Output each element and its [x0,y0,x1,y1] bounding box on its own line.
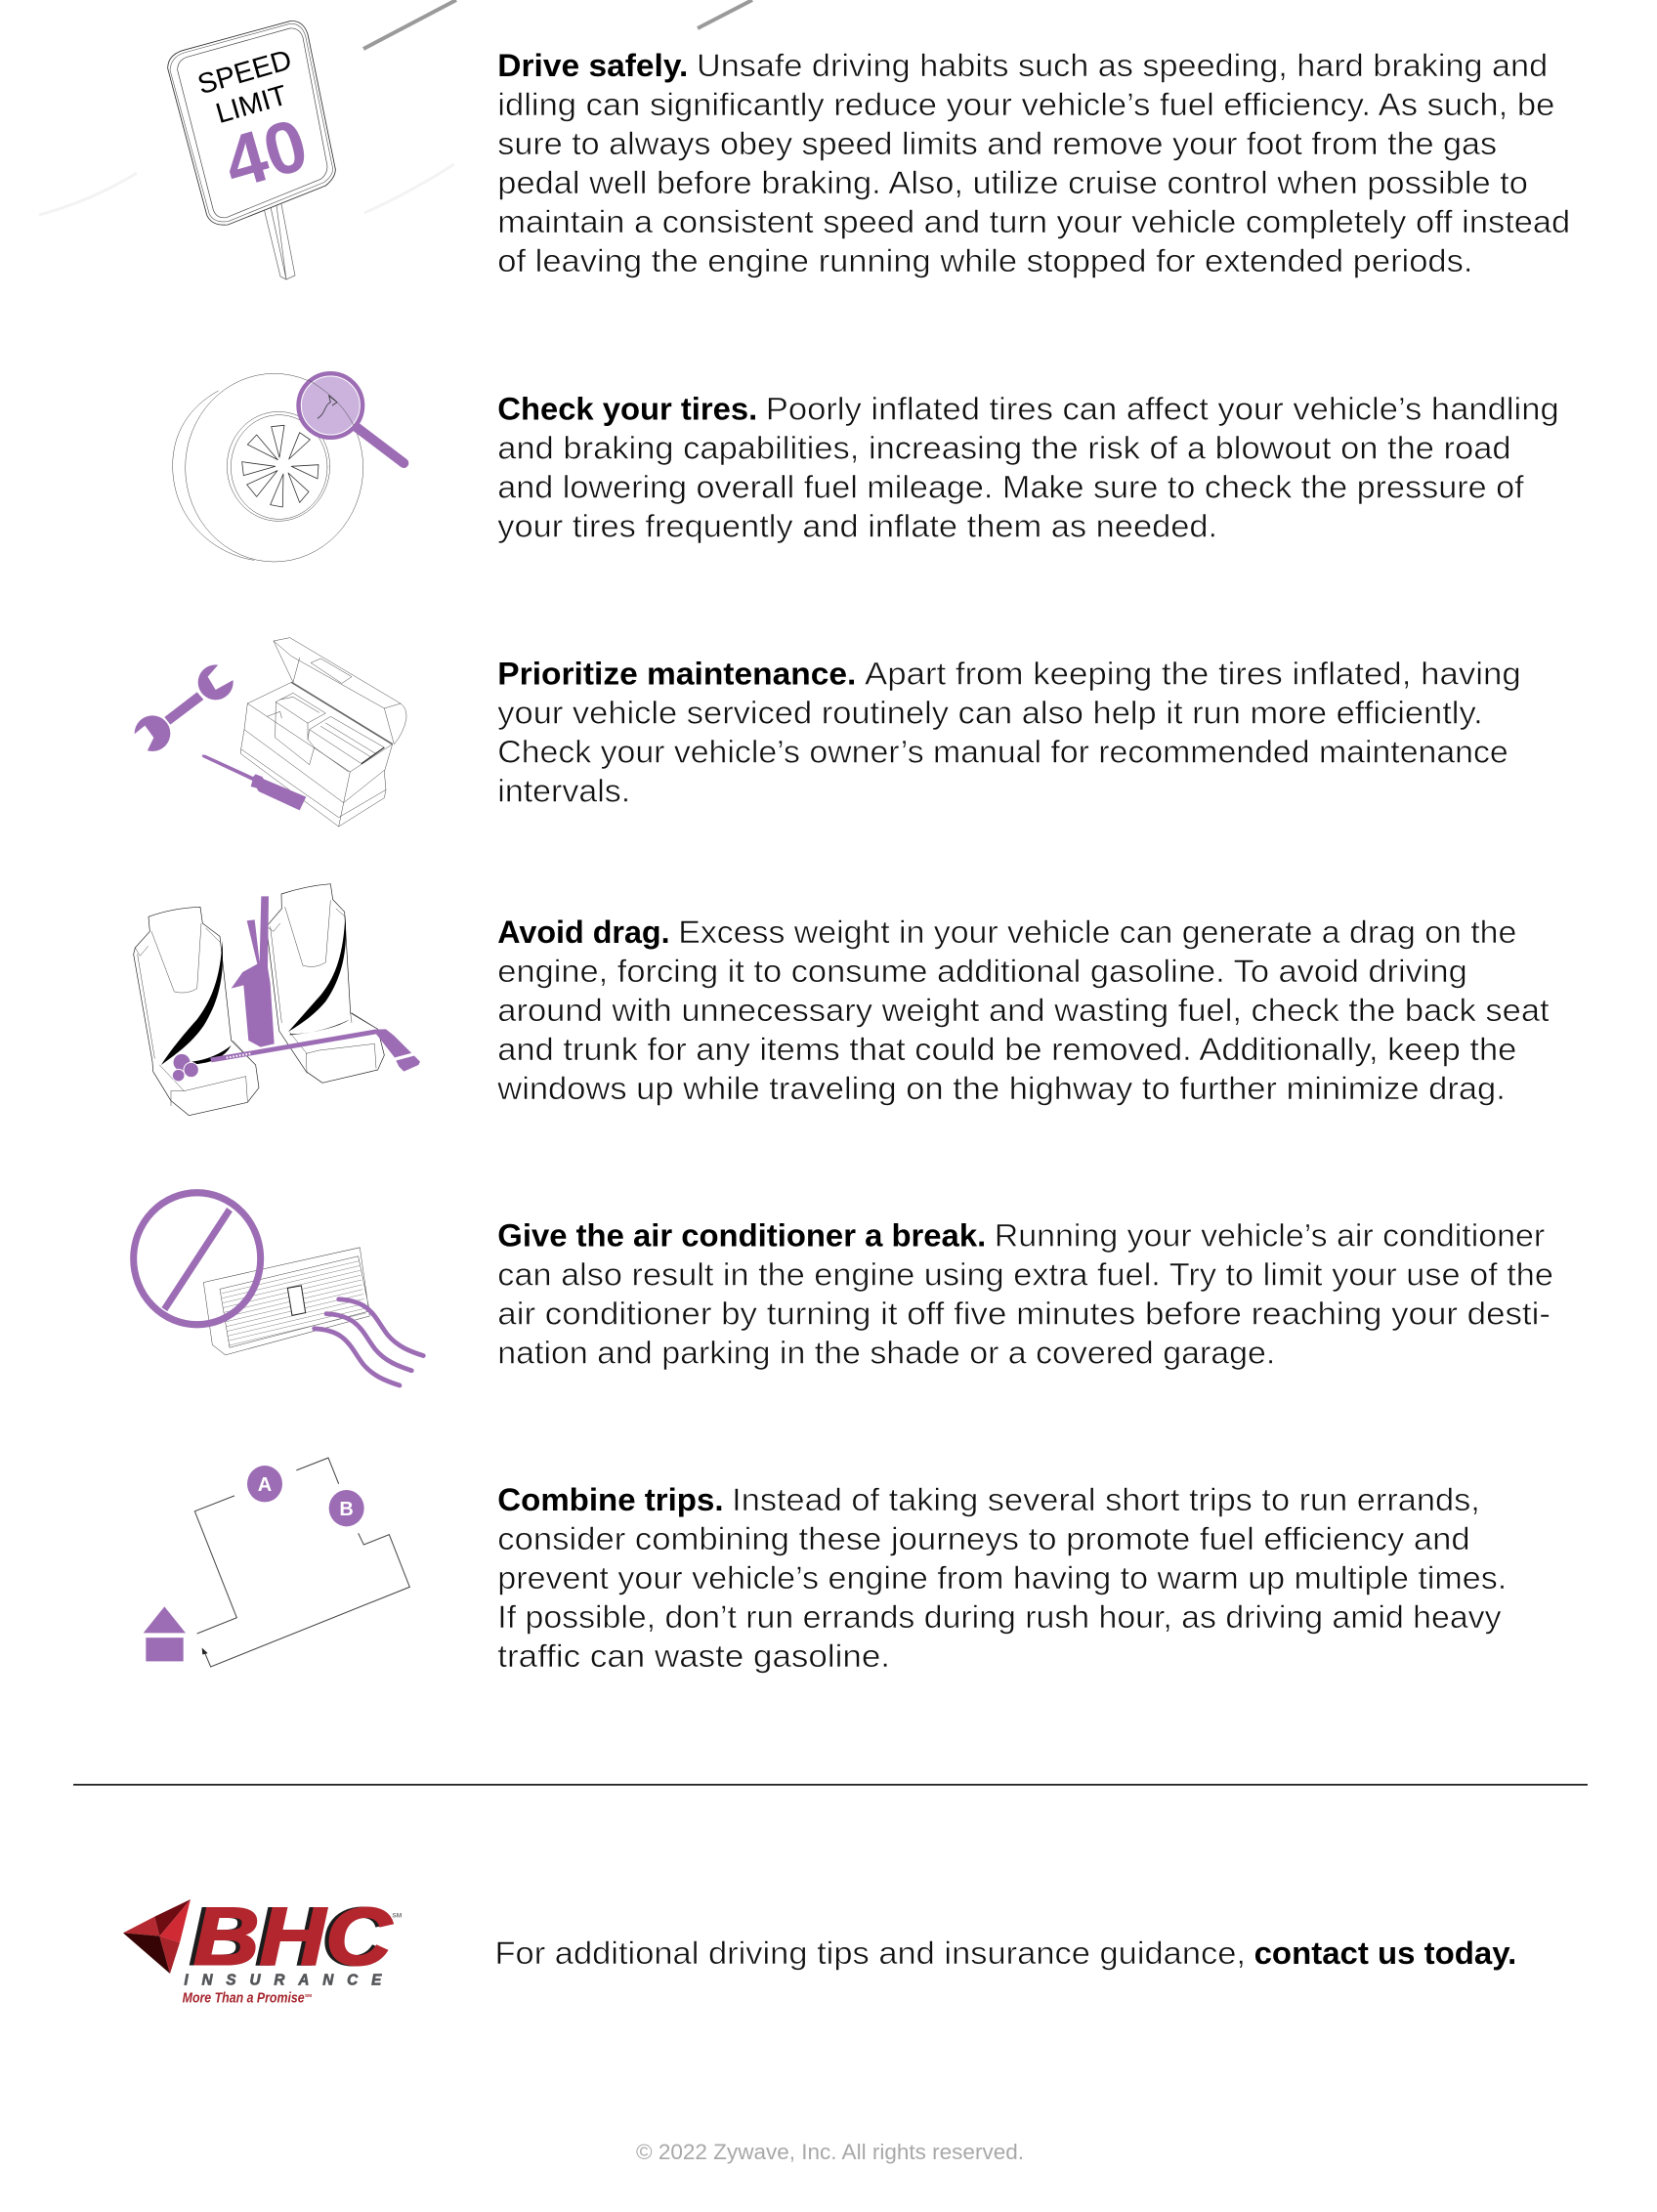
text: air conditioner: air conditioner by turning it off five minutes before reaching your desti- [497,1296,1551,1331]
icon: car seats with sports gear [134,884,420,1116]
icon: route map with stops: B [339,1499,354,1520]
panel: combine trips [144,1458,1507,1674]
balls [172,1053,198,1082]
text: combine trips: traffic can waste gasoline. [497,1638,890,1674]
icon: speed limit sign: LIMIT [212,80,291,130]
logo: BHC Insurance: INSURANCE [184,1972,382,1988]
motion lines [39,0,752,215]
text: drive safely: pedal well before braking. Also, utilize cruise control when possible to [497,165,1528,200]
text: drive safely: sure to always obey speed limits and remove your foot from the gas [497,126,1497,161]
text: prioritize maintenance [497,657,1521,809]
heading: air conditioner: Give the air conditioner a break. [497,1217,986,1253]
text: check your tires: and braking capabilities, increasing the risk of a blowout on the road [497,430,1511,465]
text: air conditioner: nation and parking in the shade or a covered garage. [497,1335,1275,1370]
heading: prioritize maintenance: Prioritize maintenance. [497,657,856,692]
text: avoid drag: Excess weight in your vehicle can generate a drag on the [678,915,1516,950]
text: prioritize maintenance: your vehicle serviced routinely can also help it run more efficiently. [497,696,1483,731]
icon: speed limit sign: SPEED [194,44,295,101]
hockey stick [210,1029,420,1072]
footer call to action [494,1936,1516,1971]
text: prioritize maintenance: Apart from keeping the tires inflated, having [865,657,1521,692]
copyright: © 2022 Zywave, Inc. All rights reserved. [636,2140,1024,2164]
screwdriver [202,755,306,810]
wrench [132,661,237,755]
icon: route map with stops [144,1458,409,1667]
text: avoid drag: around with unnecessary weight and wasting fuel, check the back seat [497,993,1550,1028]
text: drive safely: idling can significantly reduce your vehicle’s fuel efficiency. As such, be [497,87,1554,122]
icon: route map with stops: A [258,1474,272,1496]
left seat [134,907,259,1116]
heading: combine trips: Combine trips. [497,1482,723,1517]
text: drive safely: Unsafe driving habits such as speeding, hard braking and [697,48,1548,83]
text: drive safely [497,48,1570,278]
text: combine trips [497,1482,1507,1674]
logo: BHC Insurance: BHC [193,1892,394,1982]
text: drive safely: maintain a consistent speed and turn your vehicle completely off instead [497,204,1570,239]
text: avoid drag: engine, forcing it to consume additional gasoline. To avoid driving [497,954,1467,989]
text: combine trips: If possible, don’t run errands during rush hour, as driving amid heavy [497,1599,1501,1635]
logo: BHC Insurance: SM [392,1913,403,1920]
heading: drive safely: Drive safely. [497,48,688,83]
text: prioritize maintenance: intervals. [497,774,630,809]
panel: drive safely [168,21,1570,279]
text: combine trips: consider combining these journeys to promote fuel efficiency and [497,1521,1470,1556]
text: check your tires: your tires frequently and inflate them as needed. [497,508,1217,543]
logo: BHC Insurance: More Than a Promise [183,1990,305,2006]
text: avoid drag: windows up while traveling on the highway to further minimize drag. [496,1071,1506,1106]
text: air conditioner: can also result in the engine using extra fuel. Try to limit your use of the [497,1256,1553,1292]
icon: crossed-out air vent [134,1193,423,1385]
icon: speed limit sign: 40 [215,103,317,204]
footer call to action: contact us today. [1254,1936,1516,1971]
heading: check your tires: Check your tires. [497,391,757,426]
text: combine trips: prevent your vehicle’s engine from having to warm up multiple times. [497,1560,1507,1595]
text: check your tires: and lowering overall fuel mileage. Make sure to check the pressure of [497,469,1524,504]
text: check your tires [497,391,1559,543]
text: combine trips: Instead of taking several short trips to run errands, [732,1482,1480,1517]
text: check your tires: Poorly inflated tires can affect your vehicle’s handling [766,391,1559,426]
right seat [267,884,384,1083]
purple golf bag [232,896,275,1047]
icon: toolbox, wrench and screwdriver [132,638,406,827]
logo: BHC Insurance: BHC [189,1892,390,1982]
panel: avoid drag [134,884,1550,1116]
panel: prioritize maintenance [132,638,1521,827]
text: drive safely: of leaving the engine running while stopped for extended periods. [497,243,1473,278]
footer call to action: For additional driving tips and insurance guidance, [494,1936,1246,1971]
text: air conditioner [497,1217,1553,1370]
icon: speed limit sign [168,21,335,279]
logo: BHC Insurance: SM [305,1993,312,1998]
icon: tire with magnifier [173,373,404,562]
text: avoid drag: and trunk for any items that could be removed. Additionally, keep the [497,1032,1516,1067]
text: air conditioner: Running your vehicle’s air conditioner [995,1217,1546,1253]
panel: air conditioner [134,1193,1553,1385]
heading: avoid drag: Avoid drag. [497,915,670,950]
panel: check your tires [173,373,1559,562]
logo: BHC Insurance [123,1892,403,2006]
text: prioritize maintenance: Check your vehicle’s owner’s manual for recommended maintenance [497,735,1508,770]
text: avoid drag [496,915,1550,1106]
